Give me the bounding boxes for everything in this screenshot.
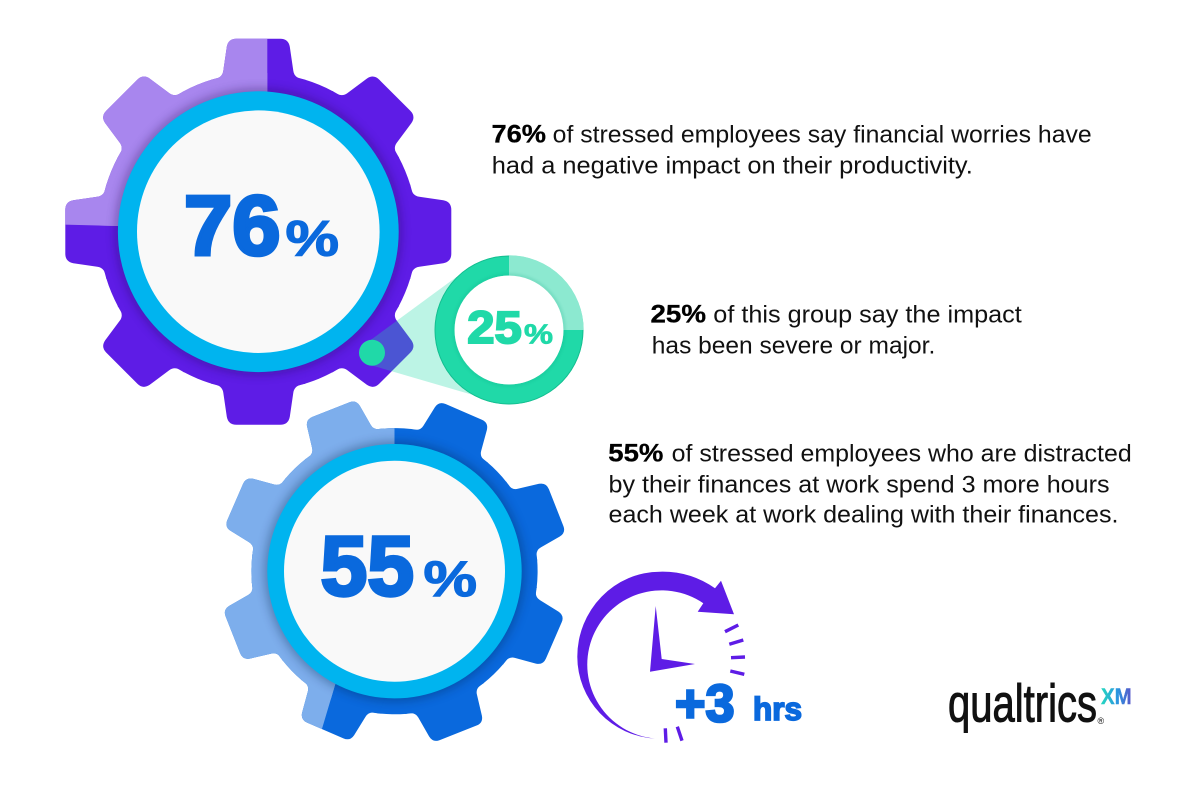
text block: 55%: by their finances at work spend 3 more hours	[608, 471, 1110, 498]
donut track	[445, 266, 573, 394]
logo: qualtrics XM: qualtrics	[948, 675, 1097, 734]
gear body: blue	[166, 343, 623, 800]
gear segment: light blue	[224, 402, 394, 729]
gear segment: light purple	[65, 38, 268, 226]
value: 55%	[320, 519, 477, 613]
clock arc and arrowhead	[577, 572, 734, 738]
gauge ring	[118, 91, 399, 372]
text block: 25%: of this group say the impact	[713, 301, 1022, 328]
icon: clock with arrow	[577, 572, 745, 743]
value: 25%: %	[524, 318, 553, 349]
text block: 76%: of stressed employees say financial worries have	[553, 121, 1092, 148]
donut: 25%	[435, 256, 583, 404]
gear: 76%	[65, 39, 451, 425]
text block: 55%: each week at work dealing with their finances.	[608, 502, 1118, 529]
label: +3 hrs: hrs	[753, 691, 802, 727]
value: 55%: %	[424, 551, 477, 607]
text block: 55%: 55%	[608, 440, 663, 468]
text block: 76%: 76%	[492, 120, 546, 148]
label: +3 hrs	[675, 674, 802, 734]
value: 25%	[467, 302, 553, 353]
text block: 55%	[608, 440, 1132, 529]
text block: 76%	[492, 120, 1092, 180]
value: 25%: 25	[467, 302, 522, 353]
label: +3 hrs: +3	[675, 674, 734, 734]
text block: 76%: had a negative impact on their productivity.	[492, 152, 973, 180]
text block: 25%: has been severe or major.	[652, 332, 935, 359]
gauge ring	[267, 444, 522, 698]
clock ticks	[665, 625, 745, 743]
clock hands	[650, 606, 695, 672]
value: 76%: %	[286, 210, 339, 266]
text block: 25%	[650, 300, 1022, 359]
gear: 55%	[224, 402, 564, 741]
text block: 25%: 25%	[650, 300, 706, 328]
value: 76%	[184, 178, 339, 272]
callout cone	[371, 277, 473, 395]
text block: 55%: of stressed employees who are distracted	[672, 441, 1132, 468]
value: 55%: 55	[320, 519, 414, 613]
value: 76%: 76	[184, 178, 280, 272]
logo: qualtrics XM: XM	[1101, 684, 1132, 709]
logo: qualtrics XM: ®	[1098, 716, 1104, 726]
callout dot	[359, 340, 385, 366]
gear body: dark purple	[65, 39, 451, 425]
donut light segment	[509, 266, 573, 330]
